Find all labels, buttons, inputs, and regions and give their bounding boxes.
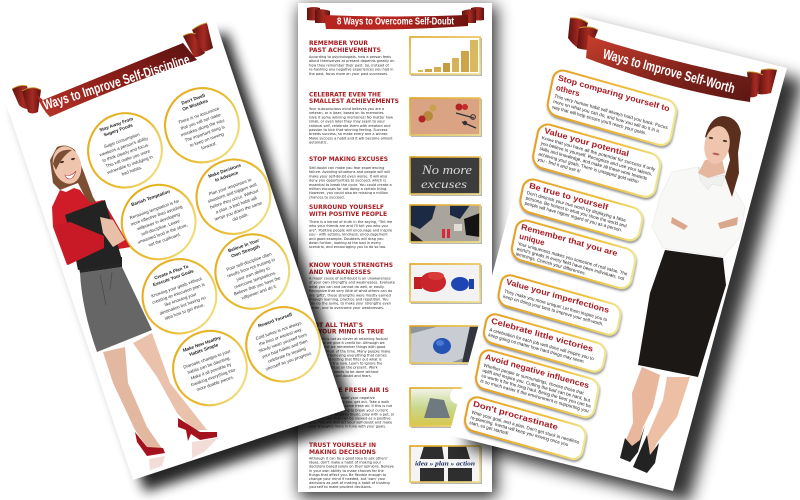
- section: remember your past achievements: about themselves at present depends greatly on: [309, 59, 394, 63]
- section: stop making excuses: essential to break the cycle. You could create a: [309, 183, 392, 187]
- section: celebrate even the smallest achievements: Give it some winning memories! No matter how: [309, 115, 393, 119]
- tip circle: believe in your own strength: willpower and do it.: [241, 283, 278, 300]
- section: not all that's in your mind is true: to mind, and letting that filter out what is: [309, 358, 382, 362]
- panel: Ways to Improve Self-Worth: [449, 12, 800, 500]
- tip card: avoid negative influences: [474, 348, 600, 419]
- section: trust yourself in making decisions: MAKING DECISIONS: [309, 449, 376, 456]
- tip circle: create a plan to execute your goals: creating an execution plan is: [152, 281, 206, 305]
- tip card: remember that you are unique: [510, 218, 637, 291]
- section: know your strengths and weaknesses: better, and to overcome your weaknesses.: [309, 306, 384, 310]
- section: fresh air: or sit outside to get some fresh air. If this is not: [309, 404, 393, 408]
- ribbon banner: self-discipline title: Ways to Improve Self-Discipline: [41, 51, 192, 113]
- section: fresh air: state of mind: listen to music, play with a pet, or: [309, 412, 395, 416]
- section: celebrate even the smallest achievements: small, or even later they may seem to your: [309, 120, 386, 124]
- ribbon banner: self-worth title: [568, 18, 777, 102]
- tip circle: banish temptation: self-discipline. Leave: [141, 218, 181, 237]
- panel: Ways to Improve Self-Discipline: [3, 20, 357, 492]
- tip card: avoid negative influences: is so much easier if the environment is supporting you.: [480, 378, 590, 414]
- section: celebrate even the smallest achievements: [309, 92, 482, 145]
- tip circle: make decisions in advance: Plan your responses to: [208, 177, 252, 197]
- tip card: value your potential: you - find it and use it!: [537, 157, 581, 174]
- tip circle: make new healthy habits simple: [163, 321, 257, 415]
- tip card: celebrate little victories: A celebration for each job well done will inspire you to: [489, 327, 595, 361]
- section: not all that's in your mind is true: towards what needs to be done without: [309, 370, 379, 374]
- tip card: stop comparing yourself to others: more on what you can do, and how you will do it in a: [553, 99, 660, 134]
- figure: woman in red jacket holding folder: [49, 143, 218, 470]
- section: know your strengths and weaknesses: of your own strengths and weaknesses. Evaluate: [309, 281, 395, 285]
- tip circle: believe in your own strength: [206, 224, 299, 319]
- tip circle: believe in your own strength: Believe In Your: [227, 238, 260, 253]
- tip card: celebrate little victories: Celebrate little victories: [490, 316, 595, 354]
- section: surround yourself with positive people: WITH POSITIVE PEOPLE: [309, 211, 387, 218]
- tip circle: make decisions in advance: Make Decisions: [208, 162, 242, 179]
- section: surround yourself with positive people: who your friends are and I'll tell you who you: [309, 224, 388, 228]
- tip card: avoid negative influences: Whether people or surroundings, choose those that: [483, 363, 585, 396]
- section: fresh air: anything else that can be viewed as a positive: [309, 416, 390, 420]
- tip circle: don't dwell on mistakes: There is no assurance: [177, 106, 220, 125]
- tip circle: make new healthy habits simple: Habits Simple: [189, 342, 219, 357]
- tip card: stop comparing yourself to others: Stop comparing yourself to: [557, 73, 670, 113]
- tip circle: banish temptation: unwanted food in the store,: [137, 222, 188, 245]
- section: know your strengths and weaknesses: what you can and cannot do well, or easily.: [309, 285, 385, 289]
- tip card: remember that you are unique: unique: [518, 232, 546, 248]
- section: stop making excuses: excuses: [421, 177, 467, 191]
- tip card: remember that you are unique: lemmings. Cherish your differences.: [515, 251, 586, 276]
- tip circle: believe in your own strength: overcome temptations.: [233, 270, 277, 290]
- tip card: remember that you are unique: Your uniqueness makes you someone of real value. The: [517, 241, 628, 277]
- tip circle: banish temptation: Removing temptation is far: [129, 198, 180, 220]
- section: trust yourself in making decisions: things that affect you. Be flexible enough to: [309, 473, 386, 477]
- section: remember your past achievements: how they remember their past. So, instead of: [309, 63, 389, 67]
- tip circle: reward yourself: Cold turkey is not always: [255, 320, 303, 341]
- section: fresh air: your thoughts more in tune with your goals.: [309, 425, 386, 429]
- section: not all that's in your mind is true: the error of believing everything that comes: [309, 353, 387, 357]
- section: know your strengths and weaknesses: [309, 262, 482, 310]
- section: celebrate even the smallest achievements: SMALLEST ACHIEVEMENTS: [309, 98, 399, 105]
- tip circle: don't dwell on mistakes: On Mistakes: [182, 98, 209, 112]
- tip circle: reward yourself: Reward Yourself: [257, 312, 293, 328]
- section: know your strengths and weaknesses: Recognize that very little of what others can do: [309, 289, 392, 293]
- tip card: don't procrastinate: start, so get started!: [469, 420, 509, 436]
- tip circle: stay away from sugary foods: vulnerable to indulging in: [106, 154, 154, 175]
- tip card: celebrate little victories: [482, 312, 607, 374]
- section: fresh air: When you feel yourself your negative: [309, 396, 375, 400]
- section: surround yourself with positive people: down further, looking at the bad in every: [309, 241, 381, 245]
- section: fresh air: possible, do something to break your current: [309, 408, 389, 412]
- section: stop making excuses: failure. Avoiding situations and people will will: [309, 170, 390, 174]
- tip card: remember that you are unique: world's greats in every field have been individuals, not: [516, 246, 626, 281]
- section: remember your past achievements: the past, focus more on your past successes.: [309, 72, 388, 76]
- tip circle: banish temptation: willpower in developing: [136, 211, 181, 231]
- section: celebrate even the smallest achievements: Your subconscious mind believes you are a: [309, 107, 384, 111]
- tip card: value your potential: achieving your goals. There is untapped gold within: [538, 151, 640, 184]
- tip circle: make decisions in advance: In Advance: [214, 170, 239, 183]
- tip circle: make decisions in advance: [187, 149, 280, 244]
- section: surround yourself with positive people: are". Positive people will encourage and inspire: [309, 228, 392, 232]
- section: stop making excuses: make your self-doubt even worse. It will also: [309, 174, 387, 178]
- section: know your strengths and weaknesses: A major cause of self-doubt is an unawareness: [309, 276, 391, 280]
- tip card: value your imperfections: [497, 273, 622, 337]
- tip card: value your imperfections: They make you more unique! Let them inspire you to: [504, 289, 608, 322]
- section: stop making excuses: Self-doubt can make you fear experiencing: [309, 166, 384, 170]
- tip circle: stay away from sugary foods: This will make you more: [105, 148, 151, 169]
- section: know your strengths and weaknesses: KNOW YOUR STRENGTHS: [309, 262, 393, 269]
- tip circle: stay away from sugary foods: weakens a person's ability: [99, 135, 149, 157]
- tip card: be true to yourself: Be true to yourself: [528, 181, 609, 212]
- section: celebrate even the smallest achievements: rational self, celebrate them with emotion and: [309, 124, 390, 128]
- tip card: don't procrastinate: re-planning. Inertia will keep you moving once you: [470, 415, 569, 447]
- tip circle: reward yourself: [237, 297, 330, 392]
- tip circle: reward yourself: celebrate by treating: [267, 346, 307, 364]
- section: not all that's in your mind is true: accuracy most of the time. Many people make: [309, 349, 390, 353]
- section: celebrate even the smallest achievements: breeds success, so make every one a winner.: [309, 132, 388, 136]
- tip circle: create a plan to execute your goals: destination but having no: [159, 295, 207, 316]
- section: surround yourself with positive people: you - with actions, kindness, encouragement: [309, 233, 388, 237]
- tip circle: believe in your own strength: Own Strength: [230, 244, 261, 259]
- section: not all that's in your mind is true: giving room to self-doubt and fears.: [309, 374, 372, 378]
- section: stop making excuses: [309, 156, 482, 199]
- section: know your strengths and weaknesses: AND WEAKNESSES: [309, 269, 371, 276]
- tip circle: don't dwell on mistakes: forward.: [201, 141, 217, 151]
- tip circle: banish temptation: not the cupboard.: [148, 232, 181, 248]
- tip card: value your potential: Know that you have all the potential for success if only: [541, 135, 656, 172]
- tip card: be true to yourself: Don't diminish your true worth by displaying a false: [526, 190, 627, 223]
- section: trust yourself in making decisions: [309, 442, 482, 489]
- tip circle: create a plan to execute your goals: idea how to get there.: [164, 302, 205, 321]
- ribbon banner: self-doubt title: 8 Ways to Overcome Self-Doubt: [337, 16, 455, 28]
- tip circle: believe in your own strength: Poor self-discipline often: [226, 251, 273, 272]
- tip circle: stay away from sugary foods: Sugary Foods: [103, 122, 134, 137]
- ribbon banner: self-discipline title: [12, 23, 213, 117]
- section: stop making excuses: chances to succeed.: [309, 195, 345, 199]
- tip circle: don't dwell on mistakes: to keep on moving: [189, 131, 225, 148]
- tip circle: believe in your own strength: your own ability to: [236, 265, 271, 282]
- tip circle: make new healthy habits simple: Make it all possible by: [190, 361, 233, 381]
- section: celebrate even the smallest achievements: veteran, or a loser, based on its memories.: [309, 111, 385, 115]
- section: not all that's in your mind is true: chatter and focus on the present. Work: [309, 366, 379, 370]
- section: fresh air: one. This will distract your self-doubt and make: [309, 421, 392, 425]
- tip circle: stay away from sugary foods: to think clearly and focus.: [102, 142, 150, 163]
- section: surround yourself with positive people: There is a kernel of truth in the saying, "Tell me: [308, 220, 392, 224]
- section: trust yourself in making decisions: Although it can be a good idea to ask others': [309, 456, 388, 460]
- tip circle: don't dwell on mistakes: Don't Dwell: [181, 93, 206, 106]
- section: trust yourself in making decisions: in your own ability to make choices for the: [309, 469, 384, 473]
- tip circle: banish temptation: [112, 175, 205, 269]
- tip circle: don't dwell on mistakes: mistakes along the way.: [180, 117, 225, 138]
- section: not all that's in your mind is true: details as we give it credit for. Although we: [309, 341, 385, 345]
- tip circle: reward yourself: the best or easiest way.: [258, 327, 303, 347]
- section: stop making excuses: STOP MAKING EXCUSES: [309, 156, 388, 163]
- tip circle: make decisions in advance: old path.: [232, 212, 249, 222]
- tip card: stop comparing yourself to others: [546, 68, 678, 148]
- section: fresh air: MORE FRESH AIR IS: [323, 387, 389, 394]
- section: remember your past achievements: According to psychologists, how a person feels: [309, 55, 391, 59]
- tip circle: reward yourself: your bad habits and then: [261, 338, 309, 359]
- section: trust yourself in making decisions: idea » plan » action: [415, 460, 475, 468]
- section: celebrate even the smallest achievements: Make success a habit and it will become almost: [309, 136, 393, 140]
- section: stop making excuses: deny you opportunities to succeed, which is: [309, 179, 386, 183]
- tip circle: make new healthy habits simple: Make New Healthy: [182, 335, 222, 353]
- section: fresh air: [309, 387, 482, 429]
- tip card: be true to yourself: persona. Be honest in what you show the world and: [525, 195, 628, 229]
- section: trust yourself in making decisions: TRUST YOURSELF IN: [309, 442, 376, 449]
- section: remember your past achievements: re-hashing any negative experiences you had in: [309, 68, 393, 72]
- section: stop making excuses: However, you could also be missing a million: [309, 191, 388, 195]
- tip card: value your imperfections: Value your imperfections: [505, 277, 611, 315]
- tip circle: reward yourself: Slowly wean yourself from: [258, 332, 308, 354]
- tip card: value your potential: Value your potential: [543, 126, 630, 159]
- section: know your strengths and weaknesses: are 'gifts', these strengths were mostly earned: [309, 293, 391, 297]
- tip card: value your imperfections: keep on doing your best to improve your self-worth.: [503, 294, 604, 327]
- tip card: value your potential: skills and knowledge, and make all these work towards: [539, 146, 648, 181]
- tip circle: make decisions in advance: tempt you down the same: [214, 200, 263, 222]
- section: celebrate even the smallest achievements: automatic.: [309, 141, 328, 145]
- section: not all that's in your mind is true: IN YOUR MIND IS TRUE: [309, 328, 384, 336]
- section: celebrate even the smallest achievements: CELEBRATE EVEN THE: [309, 92, 381, 98]
- circles group: [78, 74, 330, 421]
- tip circle: reward yourself: yourself as you progress.: [265, 350, 313, 371]
- tip circle: create a plan to execute your goals: [133, 249, 226, 344]
- section: not all that's in your mind is true: happening in the now. Learn to ignore the: [309, 362, 382, 366]
- section: surround yourself with positive people: SURROUND YOURSELF: [309, 204, 384, 211]
- tip card: stop comparing yourself to others: way that will help ensure you'll reach your goals.: [552, 104, 647, 136]
- tip circle: make decisions in advance: situations and triggers well: [207, 182, 257, 204]
- section: not all that's in your mind is true: The mind is not as clever at retaining factual: [308, 337, 388, 341]
- section: surround yourself with positive people: and good example. Doubters will drag you: [309, 237, 383, 241]
- section: remember your past achievements: PAST ACHIEVEMENTS: [309, 47, 381, 54]
- section: remember your past achievements: REMEMBER YOUR: [309, 40, 368, 47]
- section: surround yourself with positive people: scenario, and encouraging you to do so too.: [309, 245, 386, 249]
- tip circle: stay away from sugary foods: [78, 103, 172, 198]
- tip circle: create a plan to execute your goals: Execute Your Goals: [152, 268, 195, 287]
- tip card: stop comparing yourself to others: This very human habit will always hold you back. Focus: [554, 93, 669, 130]
- tip circle: make new healthy habits simple: habits can be daunting.: [187, 355, 231, 375]
- section: celebrate even the smallest achievements: passion to kick that winning feeling. Success: [309, 128, 388, 132]
- section: stop making excuses: No more: [421, 162, 472, 177]
- tip circle: make decisions in advance: before they occur. Without: [209, 188, 260, 210]
- panel: 8 Ways to Overcome Self-Doubt: [298, 3, 497, 498]
- tip circle: don't dwell on mistakes: [155, 78, 249, 173]
- ribbon banner: self-worth title: Ways to Improve Self-Worth: [601, 45, 737, 96]
- section: stop making excuses: million excuses for not doing a certain thing.: [309, 187, 387, 191]
- tip card: value your potential: [531, 122, 662, 199]
- section: trust yourself in making decisions: yourself to make prudent decisions.: [309, 485, 372, 489]
- ribbon banner: self-doubt title: [307, 7, 484, 30]
- section: know your strengths and weaknesses: can do the same, to make your strengths even: [309, 302, 391, 306]
- tip circle: don't dwell on mistakes: The important thing is: [184, 124, 226, 143]
- tip circle: stay away from sugary foods: bad habits.: [121, 165, 143, 177]
- tip circle: make new healthy habits simple: more doable pieces.: [196, 374, 235, 392]
- section: trust yourself in making decisions: decisions as part of making a habit of trusting: [309, 481, 390, 485]
- tip circle: create a plan to execute your goals: Create A Plan To: [154, 264, 189, 280]
- tip card: celebrate little victories: keep going no matter how hard things may seem.: [488, 332, 585, 364]
- section: not all that's in your mind is true: [308, 322, 482, 378]
- section: trust yourself in making decisions: change your mind if needed, but 'own' your: [309, 477, 386, 481]
- tip card: avoid negative influences: Avoid negative influences: [484, 352, 590, 390]
- section: fresh air: thoughts overtaking you, get out. Take a walk: [309, 400, 390, 404]
- tip card: don't procrastinate: Write your goal, and a plan. Don't get stuck in needless: [471, 410, 580, 445]
- tip circle: believe in your own strength: Believe that you have the: [233, 275, 282, 296]
- tip card: remember that you are unique: Remember that you are: [520, 222, 619, 258]
- tip circle: create a plan to execute your goals: like knowing your: [164, 291, 198, 307]
- tip card: avoid negative influences: so worth it for the long haul. Being the best you can be: [481, 373, 592, 409]
- tip circle: make new healthy habits simple: breaking everything into: [190, 367, 236, 387]
- section: trust yourself in making decisions: decisions based solely on their opinions. Believe: [309, 465, 394, 469]
- tip circle: stay away from sugary foods: Stay Away From: [99, 116, 134, 133]
- tip circle: make new healthy habits simple: Dramatic changes to your: [183, 348, 232, 370]
- tip circle: believe in your own strength: results from not trusting in: [226, 257, 276, 278]
- section: know your strengths and weaknesses: through learning, practice and repetition. You: [309, 298, 389, 302]
- tip card: don't procrastinate: Don't procrastinate: [472, 399, 559, 432]
- tip card: avoid negative influences: uplift and inspire you. Cutting the bad can be hard, but: [482, 368, 591, 403]
- tip card: be true to yourself: [518, 177, 644, 243]
- tip card: be true to yourself: people will have higher regard of you as a person.: [524, 200, 623, 233]
- tip card: don't procrastinate: [463, 395, 587, 461]
- section: trust yourself in making decisions: ideas, don't make a habit of making your: [309, 461, 382, 465]
- tip circle: create a plan to execute your goals: Knowing your goals without: [151, 276, 203, 299]
- tip card: value your potential: you believe in yourself. Recognize and use your talents,: [540, 140, 653, 177]
- tip circle: stay away from sugary foods: Sugar consumption: [103, 132, 141, 149]
- tip card: stop comparing yourself to others: others: [555, 83, 581, 99]
- section: not all that's in your mind is true: NOT ALL THAT'S: [309, 322, 363, 329]
- section: not all that's in your mind is true: like to think we remember things with good: [309, 345, 385, 349]
- tip circle: make decisions in advance: a plan, a bad habit will: [215, 195, 257, 215]
- tip circle: don't dwell on mistakes: that you will not make: [180, 112, 222, 131]
- section: remember your past achievements: [309, 37, 482, 76]
- tip circle: banish temptation: Banish Temptation: [130, 189, 171, 207]
- tip circle: banish temptation: more effective than avoiding: [130, 204, 183, 227]
- figure: woman in white shirt and black skirt: [620, 116, 745, 473]
- section: surround yourself with positive people: [308, 204, 482, 249]
